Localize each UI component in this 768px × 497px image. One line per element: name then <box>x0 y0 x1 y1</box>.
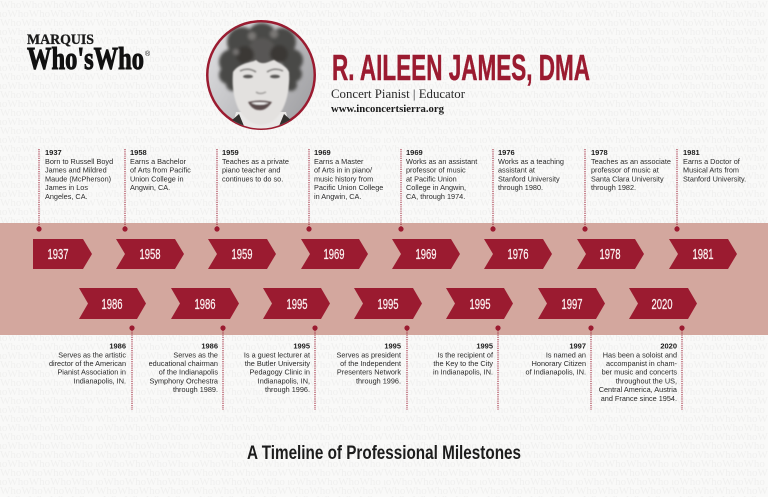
milestone 1978: professor of music at <box>591 166 659 175</box>
portrait hair <box>219 23 303 91</box>
logo: Marquis Who's Who: ® <box>145 50 151 58</box>
milestone 1976: 1976 <box>498 148 515 157</box>
milestone 1958: Angwin, CA. <box>130 183 170 192</box>
milestone 1969 master: of Arts in in piano/ <box>314 166 373 175</box>
milestone 1969 assistant professor <box>392 148 477 269</box>
milestone 1997: Honorary Citizen <box>532 359 586 368</box>
milestone 2020: accompanist in cham- <box>606 359 678 368</box>
milestone 1986 educational chairman: Serves as the <box>173 350 218 359</box>
milestone 1986 artistic director: Serves as the artistic <box>58 350 126 359</box>
milestone 1997: Is named an <box>546 350 586 359</box>
milestone 1969 assistant professor: 1969 <box>406 148 423 157</box>
milestone 1986 artistic director: 1986 <box>109 342 126 350</box>
milestone 1986 educational chairman: of the Indianapolis <box>159 368 218 377</box>
portrait nose and mouth <box>248 92 272 110</box>
milestone 1969 assistant professor: CA, through 1974. <box>406 192 465 201</box>
milestone 1995 president: Presenters Network <box>337 368 401 377</box>
milestone 1958: 1958 <box>130 148 147 157</box>
milestone 1986 artistic director: Indianapolis, IN. <box>74 376 126 385</box>
milestone 1995 guest lecturer: through 1996. <box>265 385 310 394</box>
milestone 1997: 1997 <box>562 297 582 313</box>
milestone 1995 president: 1995 <box>378 297 398 313</box>
milestone 1959: Teaches as a private <box>222 157 289 166</box>
milestone 1995 guest lecturer: Pedagogy Clinic in <box>250 368 310 377</box>
milestone 1969 assistant professor: at Pacific Union <box>406 174 457 183</box>
milestone 1976 <box>484 148 564 269</box>
milestone 1995 president: Serves as president <box>336 350 401 359</box>
milestone 1995 key to the city: 1995 <box>476 342 493 350</box>
milestone 1937: Angeles, CA. <box>45 192 88 201</box>
milestone 1978: through 1982. <box>591 183 636 192</box>
milestone 1937: James in Los <box>45 183 88 192</box>
milestone 1976: through 1980. <box>498 183 543 192</box>
website: www.inconcertsierra.org <box>331 103 444 115</box>
milestone 1986 artistic director: 1986 <box>102 297 122 313</box>
milestone 1981 <box>669 148 746 269</box>
milestone 1978 <box>577 148 671 269</box>
milestone 1997: 1997 <box>569 342 586 350</box>
milestone 2020 <box>599 288 697 410</box>
milestone 1995 president: 1995 <box>384 342 401 350</box>
milestone 1969 master: in Angwin, CA. <box>314 192 361 201</box>
milestone 1937: 1937 <box>45 148 62 157</box>
milestone 1995 key to the city: the Key to the City <box>433 359 493 368</box>
milestone 1995 guest lecturer <box>244 288 330 410</box>
milestone 1969 assistant professor: professor of music <box>406 166 466 175</box>
milestone 1995 key to the city: 1995 <box>470 297 490 313</box>
milestone 1995 guest lecturer: Indianapolis, IN, <box>258 376 310 385</box>
milestone 1986 educational chairman: 1986 <box>194 297 216 313</box>
milestone 1981: Earns a Doctor of <box>683 157 741 166</box>
milestone 1997 <box>526 288 605 410</box>
milestone 1937: Born to Russell Boyd <box>45 157 113 166</box>
milestone 1969 master: Earns a Master <box>314 157 364 166</box>
milestone 1995 president <box>336 288 422 410</box>
milestone 1995 guest lecturer: 1995 <box>293 342 310 350</box>
milestone 1986 educational chairman <box>149 288 239 410</box>
logo: Marquis Who's Who <box>27 32 151 76</box>
milestone 1986 artistic director <box>49 288 146 410</box>
milestone 1986 educational chairman: 1986 <box>201 342 218 350</box>
milestone 1976: Stanford University <box>498 174 560 183</box>
milestone 1976: Works as a teaching <box>498 157 564 166</box>
timeline band <box>0 223 768 335</box>
milestone 2020: 2020 <box>660 342 677 350</box>
milestone 2020: 2020 <box>652 297 672 313</box>
milestone 1997: of Indianapolis, IN. <box>526 368 586 377</box>
milestone 2020: Has been a soloist and <box>603 350 677 359</box>
milestone 1969 master: music history from <box>314 174 373 183</box>
milestone 1959: continues to do so. <box>222 174 283 183</box>
name heading: R. AILEEN JAMES, DMA <box>332 47 590 88</box>
milestone 1986 educational chairman: Symphony Orchestra <box>149 376 219 385</box>
milestone 1995 president: of the Independent <box>340 359 401 368</box>
milestone 1986 artistic director: Pianist Association in <box>57 368 126 377</box>
milestone 1981: 1981 <box>692 247 714 263</box>
milestone 1969 master <box>301 148 383 269</box>
milestone 1986 educational chairman: through 1989. <box>173 385 218 394</box>
milestone 2020: and France since 1954. <box>601 394 677 403</box>
milestone 1959: 1959 <box>222 148 239 157</box>
milestone 1995 guest lecturer: the Butler University <box>245 359 310 368</box>
milestone 1969 assistant professor: 1969 <box>416 247 436 263</box>
milestone 1986 artistic director: director of the American <box>49 359 126 368</box>
milestone 1969 master: 1969 <box>314 148 331 157</box>
milestone 1937 <box>33 148 113 269</box>
milestone 1969 master: Pacific Union College <box>314 183 383 192</box>
milestone 1958: Union College in <box>130 174 184 183</box>
milestone 1995 key to the city <box>433 288 513 410</box>
milestone 2020: ber music and concerts <box>602 368 677 377</box>
milestone 1995 president: through 1996. <box>356 376 401 385</box>
footer title: A Timeline of Professional Milestones <box>247 443 521 464</box>
milestone 1959: 1959 <box>232 247 252 263</box>
milestone 1978: 1978 <box>591 148 608 157</box>
portrait photo in red ring <box>206 20 316 135</box>
logo: Marquis Who's Who: Who'sWho <box>27 40 144 76</box>
portrait neck and collar <box>232 112 290 128</box>
milestone 1981: Musical Arts from <box>683 166 739 175</box>
milestone 1976: 1976 <box>508 247 528 263</box>
milestone 1978: Teaches as an associate <box>591 157 671 166</box>
milestone 1995 key to the city: in Indianapolis, IN. <box>433 368 493 377</box>
milestone 1969 assistant professor: Works as an assistant <box>406 157 477 166</box>
milestone 1981: Stanford University. <box>683 174 746 183</box>
milestone 1959 <box>208 148 289 269</box>
milestone 2020: Central America, Austria <box>599 385 678 394</box>
milestone 1959: piano teacher and <box>222 166 280 175</box>
portrait eyes <box>240 69 283 78</box>
milestone 1958: 1958 <box>140 247 160 263</box>
milestone 1976: assistant at <box>498 166 535 175</box>
milestone 1958 <box>116 148 191 269</box>
milestone 1995 key to the city: Is the recipient of <box>437 350 494 359</box>
role subtitle: Concert Pianist | Educator <box>331 86 466 101</box>
milestone 1969 assistant professor: College in Angwin, <box>406 183 466 192</box>
milestone 1995 guest lecturer: 1995 <box>286 297 308 313</box>
milestone 1937: Maude (McPherson) <box>45 174 111 183</box>
milestone 1958: of Arts from Pacific <box>130 166 191 175</box>
milestone 2020: throughout the US, <box>616 376 677 385</box>
milestone 1937: 1937 <box>48 247 68 263</box>
logo: Marquis Who's Who: MARQUIS <box>27 32 94 48</box>
milestone 1981: 1981 <box>683 148 700 157</box>
portrait face <box>232 59 290 112</box>
milestone 1969 master: 1969 <box>324 247 344 263</box>
milestone 1995 guest lecturer: Is a guest lecturer at <box>244 350 310 359</box>
milestone 1978: 1978 <box>600 247 620 263</box>
milestone 1978: Santa Clara University <box>591 174 664 183</box>
milestone 1958: Earns a Bachelor <box>130 157 187 166</box>
milestone 1937: James and Mildred <box>45 166 107 175</box>
milestone 1986 educational chairman: educational chairman <box>149 359 218 368</box>
